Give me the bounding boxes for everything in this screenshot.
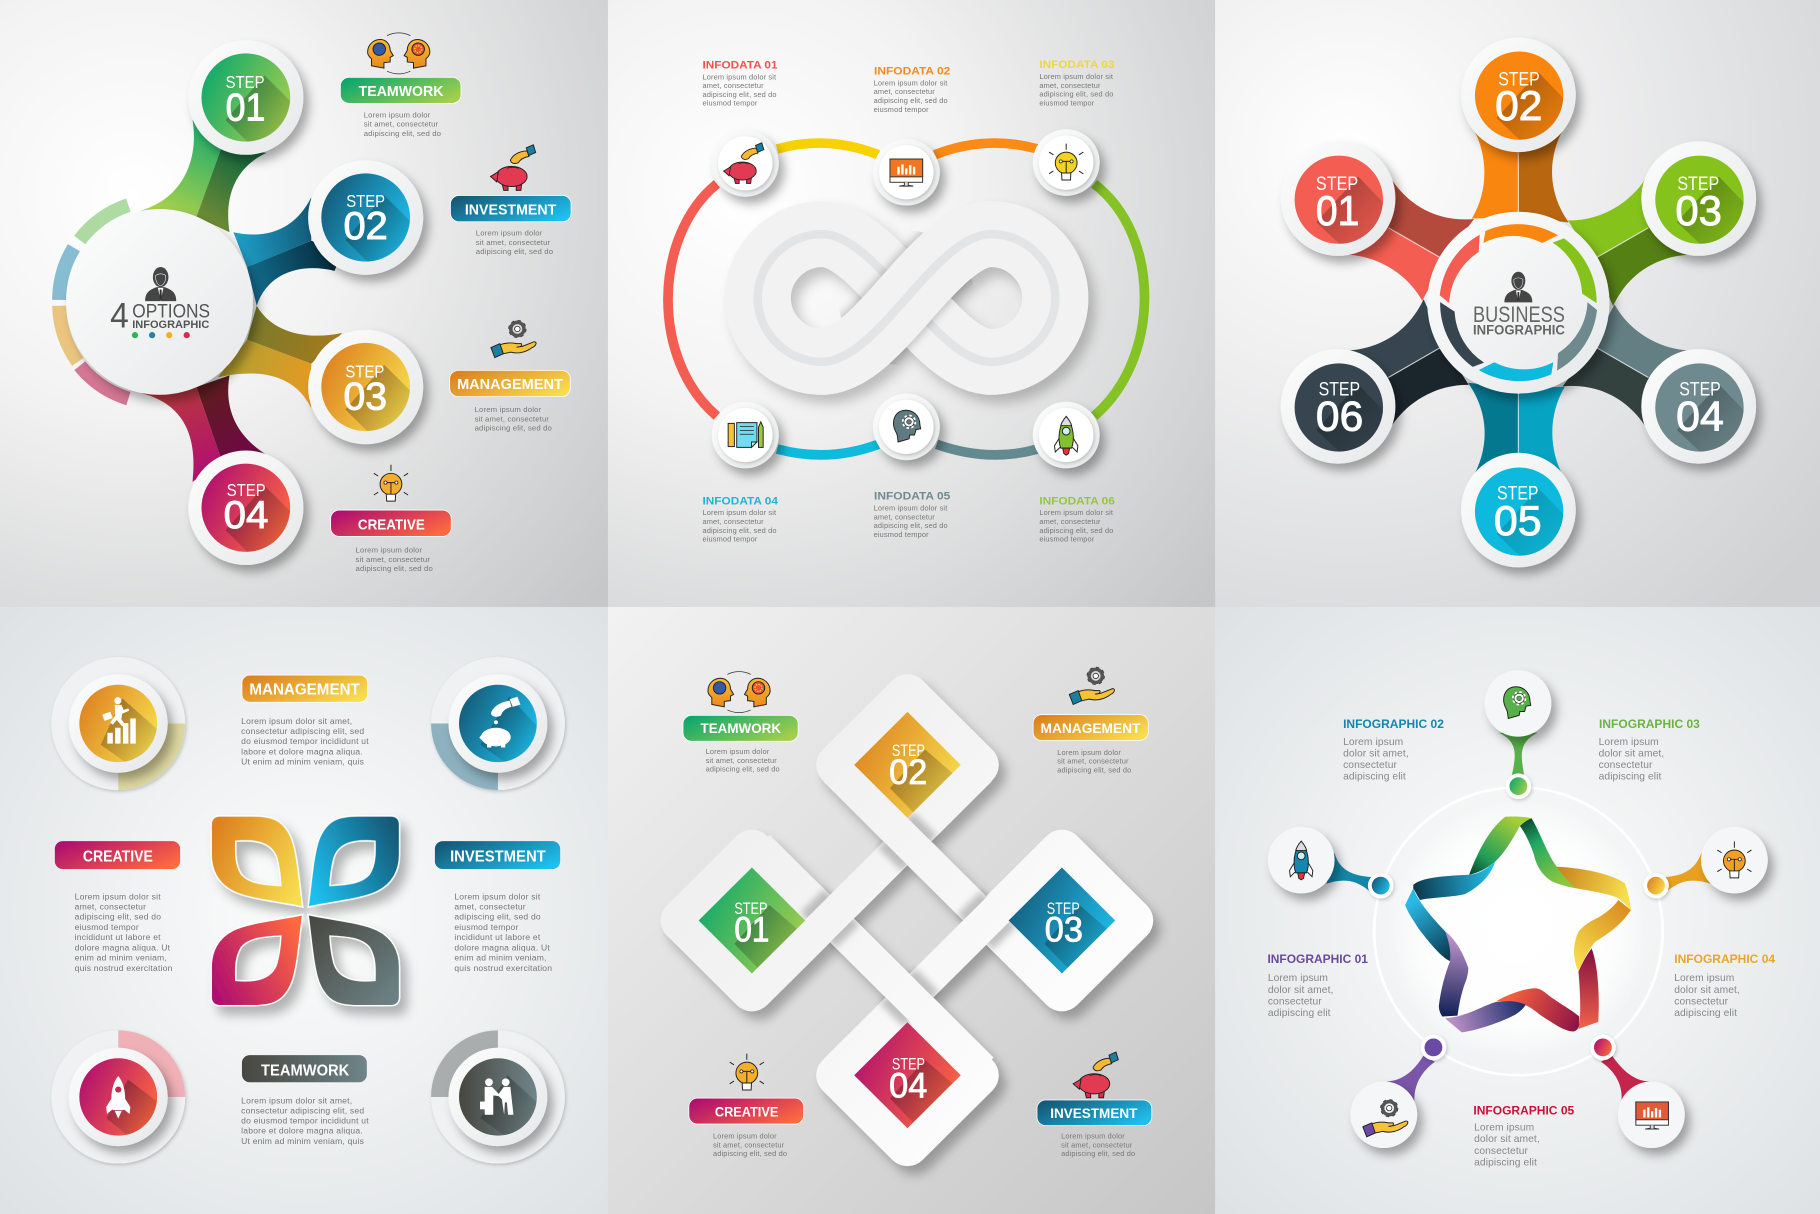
step 03: STEP bbox=[1677, 173, 1719, 195]
woven bands bbox=[744, 758, 1070, 1083]
text: creative: sit amet, consectetur bbox=[713, 1141, 785, 1150]
text: infodata 02: amet, consectetur bbox=[874, 87, 935, 96]
label: teamwork bbox=[683, 715, 798, 741]
outer ring segments bbox=[668, 143, 1145, 455]
connector: right bbox=[1664, 853, 1710, 893]
text: investment: amet, consectetur bbox=[454, 902, 526, 912]
step 02: STEP bbox=[1498, 69, 1540, 91]
text: infodata 05: INFODATA 05 bbox=[874, 491, 950, 503]
step 06: STEP bbox=[1319, 379, 1360, 401]
connector: lower left bbox=[1387, 1056, 1435, 1102]
node: head with gear bbox=[873, 394, 940, 460]
label: creative: CREATIVE bbox=[358, 517, 425, 533]
text: investment: adipiscing elit, sed do bbox=[476, 247, 553, 256]
hub title bbox=[1473, 302, 1565, 338]
step 04: STEP bbox=[892, 1056, 925, 1073]
step 01 bbox=[1281, 141, 1401, 265]
step 05: STEP bbox=[1497, 483, 1539, 505]
bubble: monitor bbox=[1618, 1081, 1685, 1148]
text: creative: enim ad minim veniam, bbox=[75, 953, 167, 963]
text: infodata 04 bbox=[702, 495, 779, 543]
step 02: 02 bbox=[1495, 82, 1542, 129]
text: infodata 02 bbox=[874, 66, 950, 114]
text: management: sit amet, consectetur bbox=[1057, 757, 1129, 766]
text: infodata 03 bbox=[1039, 59, 1114, 107]
text: infographic 01 bbox=[1267, 953, 1368, 1019]
icon: rocket bbox=[106, 1076, 130, 1119]
text: infographic 05: dolor sit amet, bbox=[1474, 1134, 1540, 1145]
text: teamwork: sit amet, consectetur bbox=[706, 756, 777, 765]
text: teamwork: adipiscing elit, sed do bbox=[364, 129, 441, 138]
text: management: Lorem ipsum dolor sit amet, bbox=[241, 716, 352, 726]
connector: left bbox=[1326, 853, 1373, 893]
label: management: MANAGEMENT bbox=[249, 681, 360, 698]
bubble: head with gear bbox=[1485, 670, 1551, 737]
icon: piggy bank bbox=[1073, 1052, 1118, 1098]
text: infodata 01: INFODATA 01 bbox=[702, 60, 778, 71]
corner badge: teamwork bbox=[431, 1030, 565, 1164]
text: investment: adipiscing elit, sed do bbox=[1061, 1149, 1135, 1158]
node: monitor bbox=[873, 139, 940, 205]
text: infographic 01: Lorem ipsum bbox=[1268, 973, 1328, 984]
label: investment: INVESTMENT bbox=[465, 202, 556, 218]
text: teamwork: adipiscing elit, sed do bbox=[706, 764, 780, 773]
step 02: STEP bbox=[892, 742, 925, 760]
text: infographic 01: consectetur bbox=[1268, 996, 1322, 1007]
connector: step 05 bbox=[1468, 383, 1565, 476]
text: infodata 03: eiusmod tempor bbox=[1039, 98, 1095, 107]
step 05: 05 bbox=[1494, 497, 1542, 544]
text: infographic 03: INFOGRAPHIC 03 bbox=[1599, 718, 1700, 731]
text: infodata 05: eiusmod tempor bbox=[874, 530, 929, 539]
text: infodata 06 bbox=[1039, 495, 1115, 543]
step 03: 03 bbox=[1045, 911, 1083, 950]
step 02 bbox=[854, 712, 961, 818]
text: management: Lorem ipsum dolor bbox=[475, 405, 542, 414]
label: teamwork bbox=[242, 1055, 367, 1082]
text: infodata 01 bbox=[702, 60, 778, 108]
step 03: STEP bbox=[1047, 900, 1080, 918]
text: creative: Lorem ipsum dolor sit bbox=[75, 892, 161, 902]
text: infographic 03 bbox=[1599, 718, 1700, 783]
text: infographic 02: Lorem ipsum bbox=[1343, 737, 1403, 748]
panel background bbox=[608, 607, 1217, 1214]
text: creative: adipiscing elit, sed do bbox=[713, 1149, 787, 1158]
hub title: OPTIONS bbox=[132, 300, 210, 322]
step 04 bbox=[854, 1022, 961, 1128]
panel: six steps hub bbox=[1215, 0, 1820, 608]
icon: teamwork heads bbox=[368, 33, 430, 74]
text: teamwork: sit amet, consectetur bbox=[364, 120, 439, 129]
text: creative: adipiscing elit, sed do bbox=[75, 912, 161, 922]
step 01 bbox=[698, 868, 805, 974]
text: investment: incididunt ut labore et bbox=[454, 932, 541, 942]
label: teamwork: TEAMWORK bbox=[701, 720, 781, 736]
text: infodata 05 bbox=[874, 491, 950, 539]
text: creative: dolore magna aliqua. Ut bbox=[75, 942, 171, 952]
ribbon star bbox=[1405, 816, 1631, 1032]
text: teamwork: labore et dolore magna aliqua. bbox=[241, 1126, 363, 1136]
text: infographic 02: consectetur bbox=[1343, 760, 1397, 771]
step 04 bbox=[1641, 349, 1762, 473]
step 04: 04 bbox=[1676, 392, 1724, 439]
text: infographic 03: dolor sit amet, bbox=[1599, 748, 1664, 759]
text: infodata 01: eiusmod tempor bbox=[702, 99, 758, 108]
bubble: light bulb bbox=[1701, 827, 1768, 893]
node: lower left bbox=[1421, 1035, 1446, 1060]
step 02: STEP bbox=[346, 191, 385, 211]
connector: step 01 bbox=[1345, 173, 1474, 303]
label: investment: INVESTMENT bbox=[1050, 1105, 1138, 1121]
panel: woven diamonds bbox=[608, 607, 1217, 1214]
panel background bbox=[0, 0, 612, 608]
step 01: 01 bbox=[734, 911, 769, 950]
text: teamwork: Lorem ipsum dolor sit amet, bbox=[241, 1096, 352, 1106]
step 06 bbox=[1281, 349, 1401, 473]
connector: step 2 bbox=[233, 197, 342, 306]
label: teamwork: TEAMWORK bbox=[359, 84, 444, 100]
icon: person bbox=[1504, 272, 1532, 302]
connector: step 4 bbox=[140, 375, 268, 482]
text: infographic 05 bbox=[1473, 1104, 1575, 1168]
colour dots bbox=[132, 332, 190, 338]
text: management: do eiusmod tempor incididunt ut bbox=[241, 736, 369, 746]
text: infodata 05: adipiscing elit, sed do bbox=[874, 521, 948, 530]
step 05 bbox=[1461, 453, 1581, 577]
text: infodata 04: Lorem ipsum dolor sit bbox=[702, 508, 776, 517]
text: infodata 06: amet, consectetur bbox=[1039, 517, 1101, 526]
step 03: 03 bbox=[1675, 187, 1722, 234]
text: teamwork: consectetur adipiscing elit, sed bbox=[241, 1106, 364, 1116]
text: teamwork: Lorem ipsum dolor bbox=[706, 747, 770, 756]
text: infodata 05: Lorem ipsum dolor sit bbox=[874, 503, 947, 512]
panel background bbox=[608, 0, 1217, 608]
node: notes bbox=[712, 402, 779, 468]
bubble: rocket bbox=[1268, 827, 1335, 893]
label: management bbox=[1033, 715, 1148, 741]
text: investment: dolore magna aliqua. Ut bbox=[454, 942, 550, 952]
hub title: INFOGRAPHIC bbox=[132, 319, 209, 331]
step 02: 02 bbox=[343, 205, 388, 248]
text: infodata 04: eiusmod tempor bbox=[702, 534, 758, 543]
step 03 bbox=[1008, 868, 1116, 974]
white ring bbox=[1374, 787, 1663, 1075]
text: infographic 03: consectetur bbox=[1599, 760, 1653, 771]
corner badge: management bbox=[51, 657, 185, 790]
text: infodata 02: eiusmod tempor bbox=[874, 105, 929, 114]
connector: top bbox=[1499, 733, 1538, 785]
text: infographic 02: dolor sit amet, bbox=[1343, 748, 1409, 759]
label: investment: INVESTMENT bbox=[450, 849, 546, 866]
corner badge: investment bbox=[431, 657, 565, 790]
text: investment: sit amet, consectetur bbox=[1061, 1141, 1133, 1150]
text: infographic 05: consectetur bbox=[1474, 1146, 1529, 1157]
knot silhouette with shadow bbox=[661, 674, 1153, 1166]
step 04: STEP bbox=[227, 480, 266, 500]
text: infodata 06: INFODATA 06 bbox=[1039, 495, 1115, 507]
panel: infinity loop bbox=[608, 0, 1217, 608]
connector: step 06 bbox=[1343, 299, 1472, 429]
label: management bbox=[450, 370, 570, 397]
text: investment: Lorem ipsum dolor bbox=[1061, 1132, 1125, 1141]
corner badge: creative bbox=[51, 1030, 185, 1164]
petals bbox=[211, 816, 400, 1006]
hub arc segments bbox=[1430, 224, 1606, 381]
text: investment: sit amet, consectetur bbox=[476, 238, 551, 247]
step 01: STEP bbox=[734, 900, 767, 918]
connector: step 1 bbox=[140, 120, 266, 232]
text: creative: sit amet, consectetur bbox=[356, 555, 430, 564]
text: creative: Lorem ipsum dolor bbox=[713, 1132, 777, 1141]
label: creative bbox=[689, 1098, 804, 1124]
text: creative: amet, consectetur bbox=[75, 902, 146, 912]
panel background bbox=[0, 607, 612, 1214]
text: management: consectetur adipiscing elit, sed bbox=[241, 726, 364, 736]
text: creative: incididunt ut labore et bbox=[75, 932, 161, 942]
step 03 bbox=[1641, 141, 1762, 265]
text: investment: adipiscing elit, sed do bbox=[454, 912, 541, 922]
text: infodata 03: adipiscing elit, sed do bbox=[1039, 89, 1113, 98]
text: management: labore et dolore magna aliqua. bbox=[241, 746, 363, 756]
text: management: Ut enim ad minim veniam, quis bbox=[241, 757, 364, 767]
step 03: STEP bbox=[345, 361, 384, 381]
text: infographic 05: INFOGRAPHIC 05 bbox=[1473, 1104, 1575, 1117]
node: right bbox=[1643, 873, 1669, 898]
text: infographic 03: Lorem ipsum bbox=[1599, 737, 1659, 748]
text: infographic 04: INFOGRAPHIC 04 bbox=[1674, 953, 1776, 966]
node: top bbox=[1506, 773, 1531, 799]
text: teamwork: do eiusmod tempor incididunt ut bbox=[241, 1116, 369, 1126]
label: creative bbox=[331, 510, 451, 536]
panel: four petals bbox=[0, 607, 612, 1214]
step 03: 03 bbox=[343, 376, 387, 418]
label: investment bbox=[435, 841, 560, 869]
text: infodata 05: amet, consectetur bbox=[874, 512, 935, 521]
step 04: 04 bbox=[889, 1066, 927, 1105]
centre glow bbox=[1387, 800, 1650, 1063]
hub title: BUSINESS bbox=[1473, 302, 1565, 327]
text: creative: adipiscing elit, sed do bbox=[356, 564, 433, 573]
text: infographic 01: adipiscing elit bbox=[1268, 1008, 1331, 1019]
bubble: hand and gear bbox=[1350, 1081, 1417, 1148]
connector: step 02 bbox=[1472, 130, 1569, 223]
text: infodata 04: INFODATA 04 bbox=[702, 495, 779, 507]
text: infodata 06: Lorem ipsum dolor sit bbox=[1039, 508, 1113, 517]
label: management: MANAGEMENT bbox=[457, 377, 563, 393]
text: management: adipiscing elit, sed do bbox=[1057, 766, 1131, 775]
text: infodata 03: Lorem ipsum dolor sit bbox=[1039, 72, 1113, 81]
text: investment: enim ad minim veniam, bbox=[454, 953, 547, 963]
node: left bbox=[1368, 873, 1393, 898]
label: creative: CREATIVE bbox=[83, 849, 153, 866]
text: infographic 02 bbox=[1343, 718, 1444, 783]
step 04: 04 bbox=[224, 494, 268, 537]
connector: step 3 bbox=[218, 306, 342, 408]
text: teamwork: Ut enim ad minim veniam, quis bbox=[241, 1136, 364, 1146]
text: infographic 04: dolor sit amet, bbox=[1674, 985, 1740, 996]
icon: hand and gear bbox=[491, 322, 536, 358]
label: investment bbox=[1037, 1100, 1152, 1126]
node: lower right bbox=[1590, 1035, 1616, 1060]
step 01: STEP bbox=[226, 72, 265, 92]
text: infodata 01: adipiscing elit, sed do bbox=[702, 90, 777, 99]
text: creative: eiusmod tempor bbox=[75, 922, 139, 932]
text: infodata 02: Lorem ipsum dolor sit bbox=[874, 79, 947, 88]
label: teamwork bbox=[340, 77, 461, 103]
step 01: STEP bbox=[1316, 173, 1358, 195]
text: infographic 04: consectetur bbox=[1674, 996, 1729, 1007]
text: infographic 01: INFOGRAPHIC 01 bbox=[1267, 953, 1368, 966]
centre hub bbox=[1427, 212, 1609, 394]
text: teamwork: Lorem ipsum dolor bbox=[364, 110, 431, 119]
text: creative: quis nostrud exercitation bbox=[75, 963, 173, 973]
text: investment: quis nostrud exercitation bbox=[454, 963, 552, 973]
text: infographic 05: adipiscing elit bbox=[1474, 1157, 1537, 1168]
text: creative: Lorem ipsum dolor bbox=[356, 546, 422, 555]
text: infographic 01: dolor sit amet, bbox=[1268, 985, 1333, 996]
connector: step 04 bbox=[1563, 302, 1692, 433]
text: management: Lorem ipsum dolor bbox=[1057, 748, 1121, 757]
hub title bbox=[110, 295, 210, 335]
text: infodata 06: eiusmod tempor bbox=[1039, 534, 1095, 543]
text: infodata 03: INFODATA 03 bbox=[1039, 59, 1114, 71]
icon: person bbox=[145, 267, 176, 301]
panel background bbox=[1215, 607, 1820, 1214]
text: infodata 02: INFODATA 02 bbox=[874, 66, 950, 78]
step 04: STEP bbox=[1679, 379, 1721, 401]
icon: light bulb bbox=[374, 465, 408, 501]
centre hub bbox=[66, 209, 253, 395]
text: infodata 01: amet, consectetur bbox=[702, 81, 764, 90]
outer colour arcs bbox=[59, 205, 128, 399]
node: rocket bbox=[1033, 402, 1100, 468]
step 02 bbox=[1461, 38, 1581, 161]
icon: piggy bank bbox=[491, 145, 536, 190]
label: management bbox=[242, 675, 368, 702]
text: infographic 02: adipiscing elit bbox=[1343, 772, 1406, 783]
connector: step 03 bbox=[1565, 176, 1694, 306]
icon: runner on bars bbox=[102, 697, 136, 744]
icon: hand over piggy bbox=[479, 697, 520, 747]
label: management: MANAGEMENT bbox=[1041, 720, 1141, 736]
text: investment: eiusmod tempor bbox=[454, 922, 519, 932]
label: creative: CREATIVE bbox=[715, 1103, 778, 1119]
step 04 bbox=[188, 450, 308, 574]
icon: hand and gear bbox=[1069, 669, 1114, 705]
step 06: 06 bbox=[1316, 392, 1363, 439]
text: infodata 04: amet, consectetur bbox=[702, 517, 764, 526]
hub title: 4 bbox=[110, 295, 129, 335]
connector: lower right bbox=[1601, 1056, 1649, 1102]
text: infodata 02: adipiscing elit, sed do bbox=[874, 96, 948, 105]
icon: light bulb bbox=[730, 1054, 764, 1090]
text: infographic 04: adipiscing elit bbox=[1674, 1008, 1737, 1019]
panel: ribbon star bbox=[1215, 607, 1820, 1214]
text: infodata 04: adipiscing elit, sed do bbox=[702, 526, 777, 535]
text: infographic 05: Lorem ipsum bbox=[1474, 1123, 1534, 1134]
infinity symbol bbox=[758, 234, 1055, 362]
text: infodata 03: amet, consectetur bbox=[1039, 81, 1101, 90]
text: management: sit amet, consectetur bbox=[475, 414, 549, 423]
step 02: 02 bbox=[889, 753, 927, 792]
icon: handshake bbox=[480, 1078, 513, 1115]
node: light bulb bbox=[1033, 129, 1100, 196]
step 01: 01 bbox=[1316, 187, 1359, 234]
step 02 bbox=[308, 160, 428, 283]
step 03 bbox=[308, 330, 428, 453]
label: teamwork: TEAMWORK bbox=[261, 1062, 350, 1079]
icon: teamwork heads bbox=[708, 672, 770, 713]
panel: 4 options metaball bbox=[0, 0, 612, 608]
hub title: INFOGRAPHIC bbox=[1473, 323, 1565, 338]
node: piggy bank bbox=[712, 130, 779, 197]
text: infographic 02: INFOGRAPHIC 02 bbox=[1343, 718, 1444, 731]
text: investment: Lorem ipsum dolor bbox=[476, 229, 543, 238]
label: creative bbox=[55, 841, 180, 869]
step 01 bbox=[188, 40, 308, 163]
step 01: 01 bbox=[226, 87, 265, 130]
label: investment bbox=[450, 195, 571, 222]
text: infographic 04: Lorem ipsum bbox=[1674, 973, 1734, 984]
text: investment: Lorem ipsum dolor sit bbox=[454, 892, 541, 902]
text: infodata 01: Lorem ipsum dolor sit bbox=[702, 72, 776, 81]
text: infographic 03: adipiscing elit bbox=[1599, 772, 1661, 783]
text: management: adipiscing elit, sed do bbox=[475, 424, 552, 433]
panel background bbox=[1215, 0, 1820, 608]
text: infographic 04 bbox=[1674, 953, 1776, 1019]
text: infodata 06: adipiscing elit, sed do bbox=[1039, 526, 1113, 535]
